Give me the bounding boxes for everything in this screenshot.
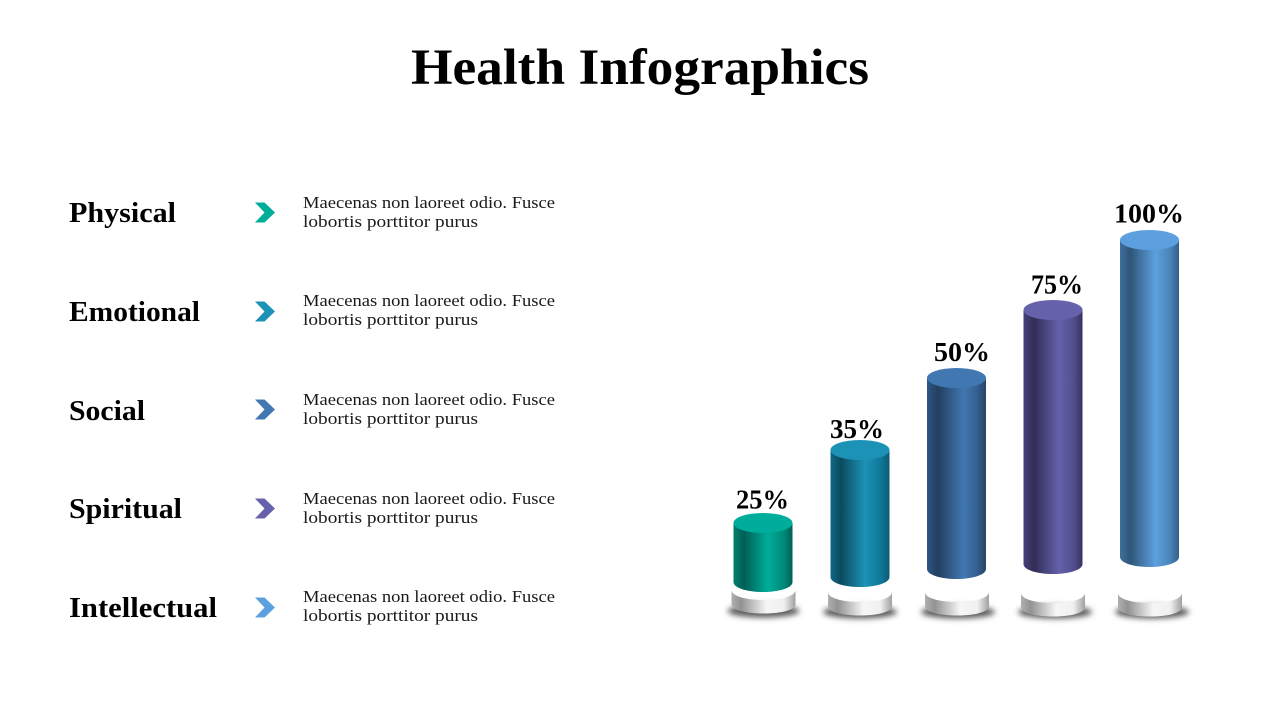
icon: chevron teal [255, 202, 275, 222]
description: Physical: lobortis porttitor purus [303, 212, 478, 231]
label: Spiritual: Spiritual [69, 494, 182, 525]
description: Emotional: lobortis porttitor purus [303, 310, 478, 329]
description: Spiritual: lobortis porttitor purus [303, 508, 478, 527]
label: Physical: Physical [69, 198, 176, 229]
bar: 25% [728, 484, 800, 618]
description: Spiritual: Maecenas non laoreet odio. Fusce [303, 489, 555, 508]
label: Intellectual: Intellectual [69, 593, 217, 624]
title: Health Infographics [411, 40, 869, 96]
list row: Emotional [69, 291, 555, 329]
label: Social: Social [69, 396, 145, 427]
description: Intellectual: Maecenas non laoreet odio. Fusce [303, 587, 555, 606]
description: Social: Maecenas non laoreet odio. Fusce [303, 390, 555, 409]
description: Emotional: Maecenas non laoreet odio. Fusce [303, 291, 555, 310]
description: Physical: Maecenas non laoreet odio. Fusce [303, 193, 555, 212]
value: 25%: 25% [736, 484, 789, 514]
label: Emotional: Emotional [69, 297, 200, 328]
list row: Social [69, 390, 555, 428]
bar: 35% [823, 414, 897, 618]
description: Social: lobortis porttitor purus [303, 409, 478, 428]
icon: chevron purple [255, 498, 275, 518]
list row: Spiritual [69, 489, 555, 527]
value: 75%: 75% [1031, 270, 1083, 300]
bar: 50% [921, 337, 995, 618]
value: 35%: 35% [830, 414, 884, 444]
bar: 100% [1114, 198, 1189, 618]
list row: Physical [69, 193, 555, 231]
value: 50%: 50% [934, 337, 990, 367]
value: 100%: 100% [1114, 198, 1184, 228]
list row: Intellectual [69, 587, 555, 625]
bar: 75% [1018, 270, 1092, 618]
icon: chevron blue-teal [255, 302, 275, 322]
icon: chevron light blue [255, 598, 275, 618]
cylinder bar chart [728, 198, 1189, 618]
description: Intellectual: lobortis porttitor purus [303, 606, 478, 625]
icon: chevron blue [255, 400, 275, 420]
